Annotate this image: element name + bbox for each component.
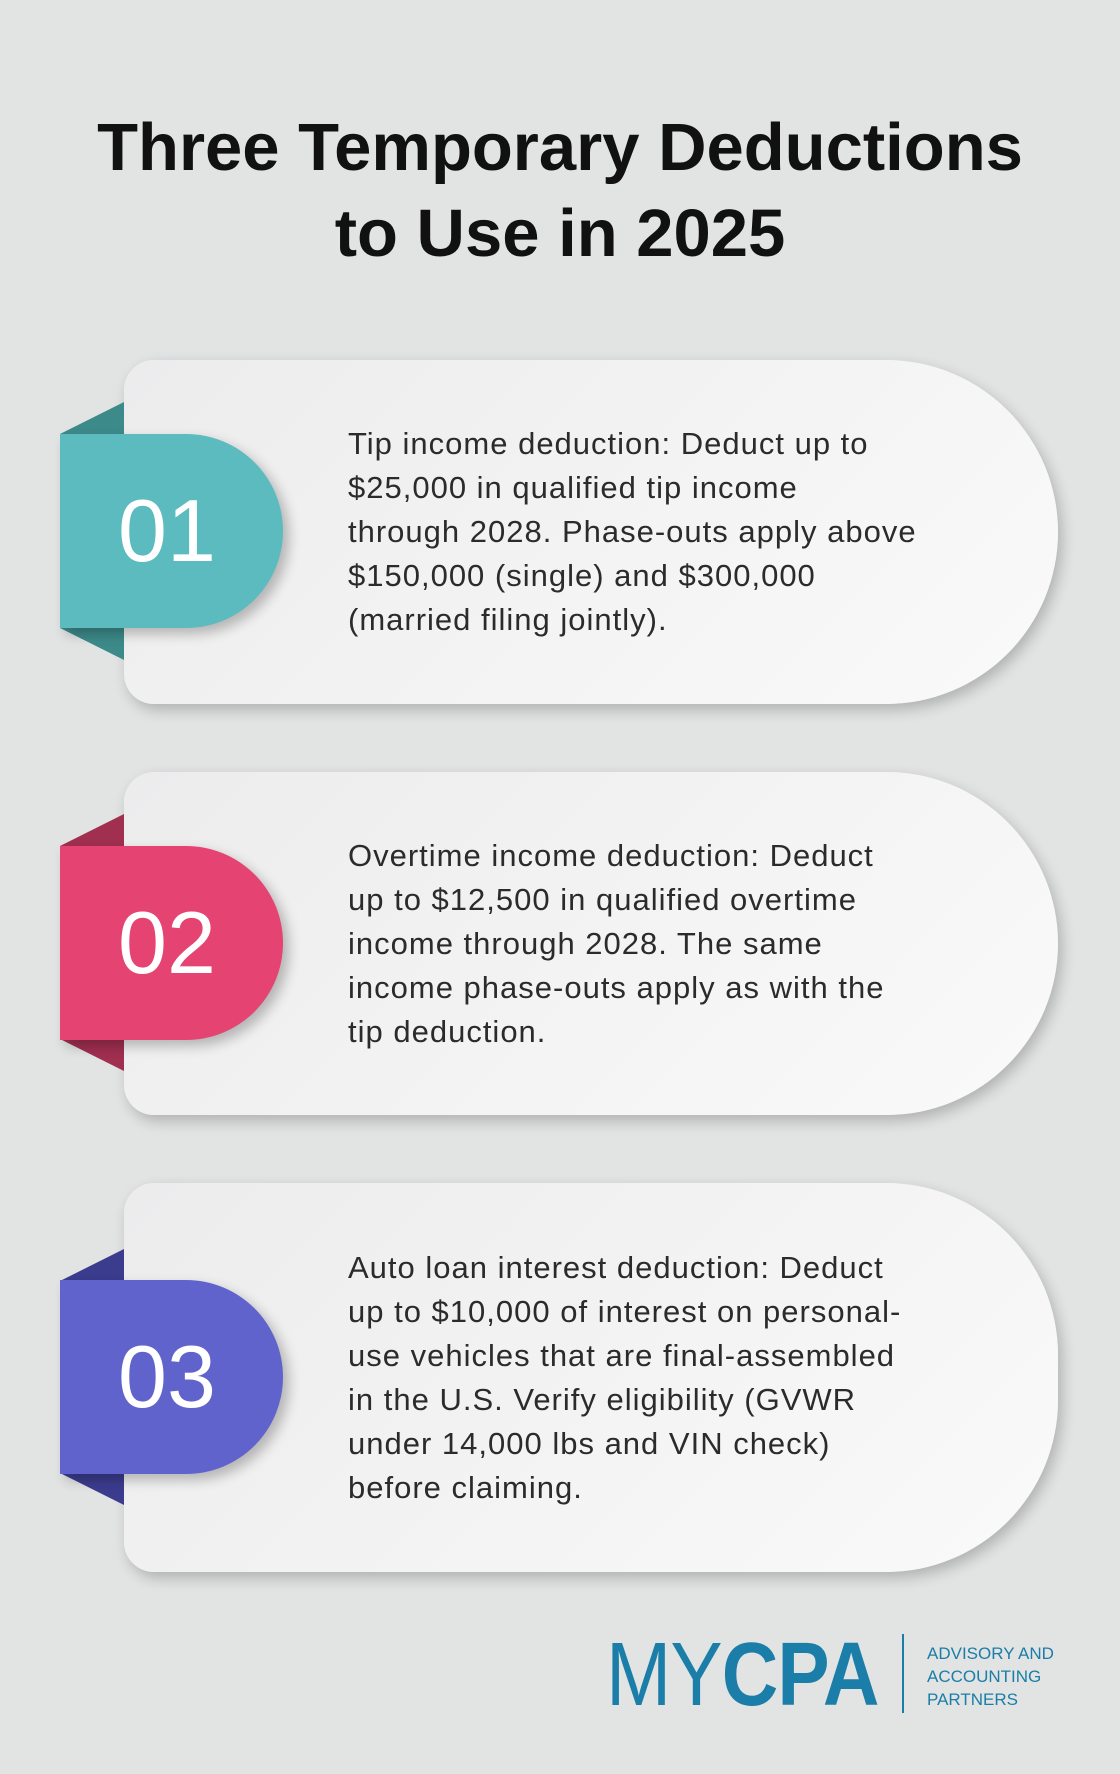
- text: overtime: [348, 838, 884, 1049]
- title: [97, 110, 1023, 271]
- panel: card 2: [124, 772, 1058, 1115]
- badge 03: 03: [118, 1327, 216, 1426]
- title: to Use in 2025: [335, 196, 785, 271]
- text: auto loan: under 14,000 lbs and VIN check): [348, 1426, 830, 1461]
- icon: fold 3 bottom: [62, 1474, 124, 1505]
- text: auto loan: Auto loan interest deduction: Deduct: [348, 1250, 884, 1285]
- text: auto loan: [348, 1250, 901, 1505]
- icon: fold 2 top: [60, 814, 124, 846]
- text: tip income: $150,000 (single) and $300,000: [348, 558, 816, 593]
- text: overtime: income phase-outs apply as with the: [348, 970, 884, 1005]
- icon: fold 2 bottom: [62, 1040, 124, 1071]
- logo tagline: PARTNERS: [927, 1690, 1018, 1709]
- text: tip income: Tip income deduction: Deduct up to: [348, 426, 869, 461]
- icon: fold 3 top: [62, 1249, 124, 1280]
- panel: card 1: [124, 360, 1058, 704]
- text: overtime: tip deduction.: [348, 1014, 546, 1049]
- panel: card 3: [124, 1183, 1058, 1572]
- title: Three Temporary Deductions: [97, 110, 1023, 185]
- text: tip income: (married filing jointly).: [348, 602, 668, 637]
- text: tip income: through 2028. Phase-outs apply above: [348, 514, 917, 549]
- text: overtime: income through 2028. The same: [348, 926, 823, 961]
- logo divider: [902, 1634, 904, 1713]
- text: tip income: [348, 426, 917, 637]
- logo tagline: ACCOUNTING: [927, 1667, 1041, 1686]
- text: auto loan: before claiming.: [348, 1470, 583, 1505]
- text: auto loan: in the U.S. Verify eligibility (GVWR: [348, 1382, 856, 1417]
- badge 01: [60, 434, 283, 628]
- logo: [606, 1625, 1054, 1725]
- text: overtime: up to $12,500 in qualified overtime: [348, 882, 857, 917]
- icon: fold 1 bottom: [60, 628, 124, 660]
- badge 02: 02: [118, 893, 216, 992]
- logo tagline: [927, 1644, 1054, 1709]
- text: overtime: Overtime income deduction: Deduct: [348, 838, 874, 873]
- badge 01: 01: [118, 481, 216, 580]
- badge 02: [60, 846, 283, 1040]
- logo tagline: ADVISORY AND: [927, 1644, 1054, 1663]
- text: tip income: $25,000 in qualified tip income: [348, 470, 798, 505]
- icon: fold 1 top: [60, 402, 124, 434]
- badge 03: [60, 1280, 283, 1474]
- text: auto loan: up to $10,000 of interest on personal-: [348, 1294, 901, 1329]
- logo wordmark: MYCPA: [606, 1625, 879, 1725]
- text: auto loan: use vehicles that are final-assembled: [348, 1338, 895, 1373]
